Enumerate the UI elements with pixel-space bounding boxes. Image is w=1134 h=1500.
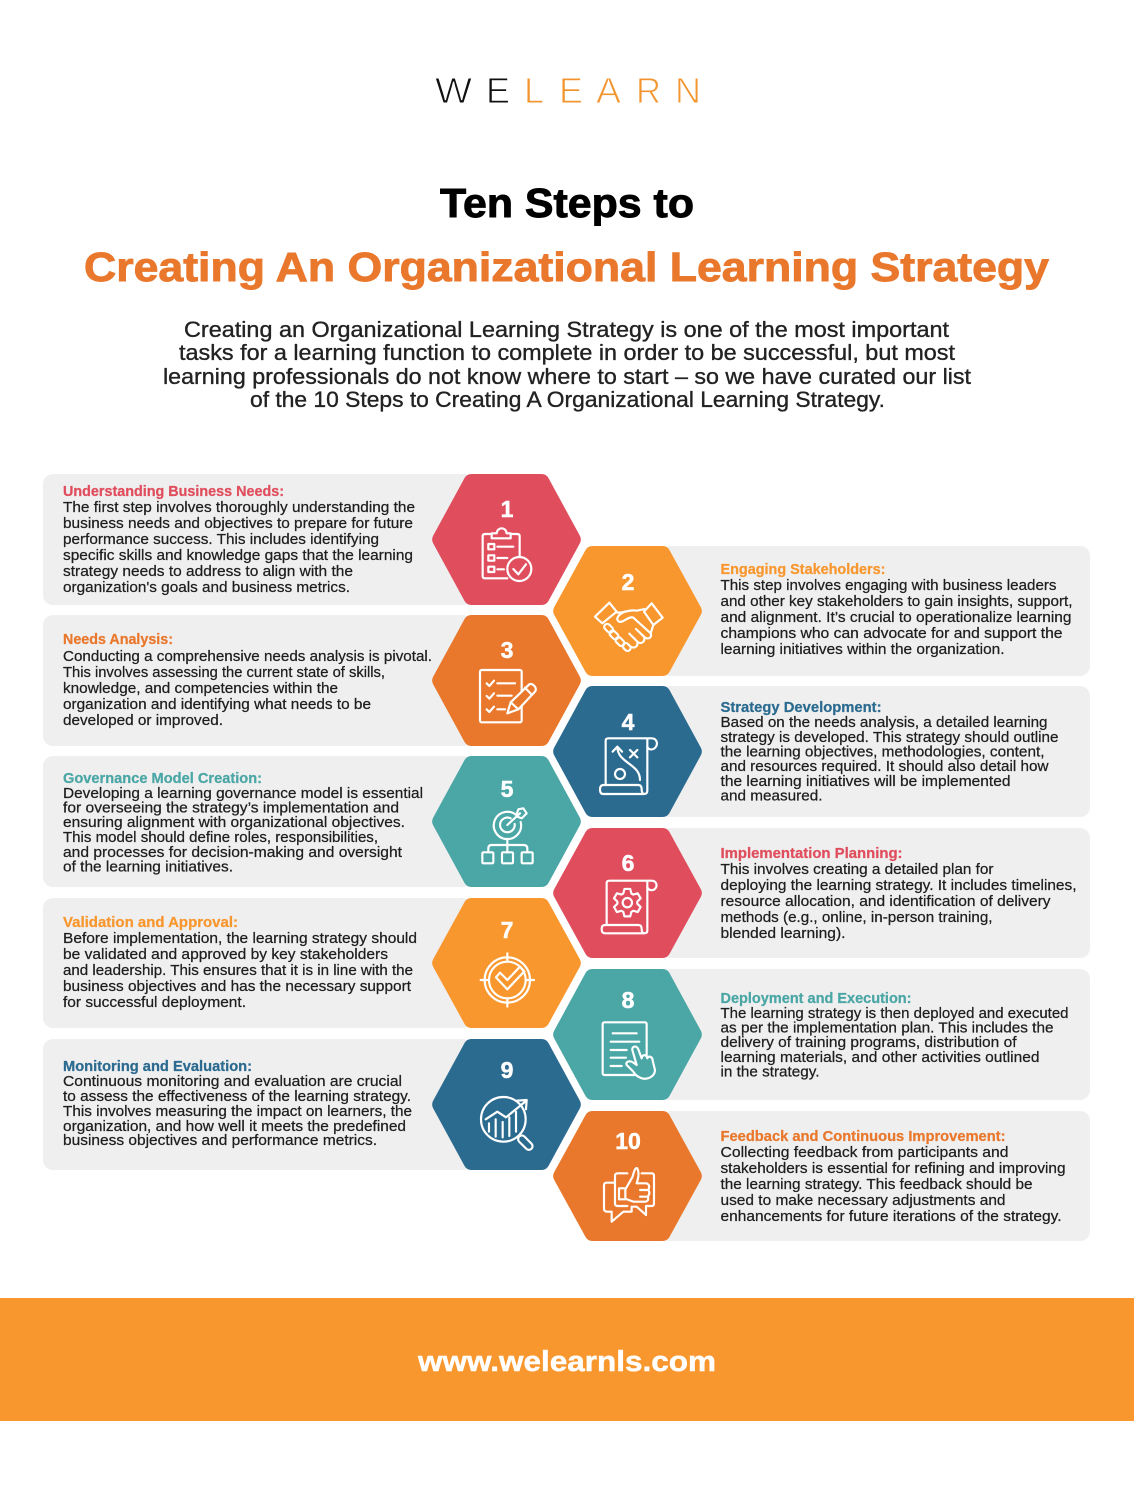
title: Creating An Organizational Learning Strategy: [84, 244, 1049, 290]
intro text: [163, 317, 971, 412]
body: step 4: the learning initiatives will be implemented: [720, 773, 1010, 790]
body: step 1: organization's goals and business metrics.: [63, 579, 350, 596]
intro text: of the 10 Steps to Creating A Organizational Learning Strategy.: [250, 387, 885, 412]
heading: step 8: Deployment and Execution:: [720, 991, 912, 1007]
body: step 9: organization, and how well it meets the predefined: [63, 1118, 406, 1135]
hexagon: step 10: [561, 1119, 694, 1233]
heading: step 9: Monitoring and Evaluation:: [63, 1059, 252, 1075]
body: step 1: strategy needs to address to align with the: [63, 563, 353, 580]
body: step 3: developed or improved.: [63, 712, 223, 729]
panel: step 9: [43, 1039, 473, 1170]
icon: thumbs up with speech bubbles: [604, 1168, 654, 1222]
heading: step 4: Strategy Development:: [720, 700, 882, 716]
body: step 1: performance success. This includes identifying: [63, 531, 379, 548]
body: step 10: enhancements for future iterations of the strategy.: [720, 1208, 1062, 1225]
logo: WELEARN: A: [596, 70, 621, 111]
body: step 6: blended learning).: [720, 925, 846, 942]
number 5: 5: [501, 776, 514, 802]
panel: step 7: [43, 898, 473, 1028]
panel: step 3: [43, 615, 473, 746]
number 4: 4: [622, 709, 635, 735]
body: step 10: [720, 1144, 1066, 1225]
icon: gear scroll: [602, 881, 657, 933]
body: step 3: This involves assessing the current state of skills,: [63, 664, 385, 681]
icon: clipboard with check: [483, 528, 531, 581]
body: step 7: and leadership. This ensures that it is in line with the: [63, 962, 413, 979]
body: step 4: and measured.: [720, 788, 822, 804]
body: step 6: methods (e.g., online, in-person training,: [720, 909, 992, 926]
body: step 10: stakeholders is essential for refining and improving: [720, 1160, 1066, 1177]
icon: strategy scroll: [600, 738, 657, 794]
body: step 4: strategy is developed. This strategy should outline: [720, 729, 1058, 746]
body: step 5: of the learning initiatives.: [63, 858, 233, 876]
body: step 5: and processes for decision-making and oversight: [63, 844, 403, 861]
heading: step 6: Implementation Planning:: [720, 846, 902, 862]
hexagon: step 5: [440, 764, 573, 879]
hexagon: step 7: [440, 906, 573, 1020]
body: step 4: the learning objectives, methodologies, content,: [720, 744, 1044, 760]
icon: checklist and pencil: [480, 670, 536, 722]
intro text: tasks for a learning function to complete in order to be successful, but most: [179, 340, 955, 365]
hexagon: step 4: [561, 694, 694, 809]
logo: WELEARN: E: [559, 70, 583, 111]
icon: target and org chart: [482, 808, 533, 863]
hexagon: step 1: [440, 482, 573, 597]
icon: handshake: [595, 603, 663, 652]
number 9: 9: [501, 1057, 513, 1083]
logo: WELEARN: W: [435, 70, 472, 111]
body: step 9: to assess the effectiveness of the learning strategy.: [63, 1088, 411, 1105]
body: step 9: business objectives and performance metrics.: [63, 1132, 377, 1149]
logo: WELEARN: N: [675, 70, 701, 111]
number 2: 2: [622, 569, 634, 595]
logo: WELEARN: R: [636, 70, 661, 111]
body: step 1: [63, 499, 415, 596]
hexagon: step 8: [561, 977, 694, 1092]
body: step 9: This involves measuring the impact on learners, the: [63, 1103, 412, 1120]
body: step 8: as per the implementation plan. This includes the: [720, 1020, 1054, 1036]
title: [84, 180, 1049, 290]
body: step 3: organization and identifying what needs to be: [63, 696, 371, 713]
number 8: 8: [622, 987, 635, 1013]
panel: step 1: [43, 474, 473, 605]
body: step 5: ensuring alignment with organizational objectives.: [63, 814, 405, 831]
body: step 8: in the strategy.: [720, 1064, 820, 1080]
body: step 5: Developing a learning governance model is essential: [63, 785, 423, 802]
icon: document with hand: [603, 1022, 655, 1079]
body: step 5: [63, 785, 423, 876]
body: step 5: for overseeing the strategy’s implementation and: [63, 800, 399, 816]
body: step 8: delivery of training programs, distribution of: [720, 1034, 1017, 1051]
body: step 7: Before implementation, the learning strategy should: [63, 930, 417, 947]
hexagon: step 9: [440, 1047, 573, 1162]
number 1: 1: [501, 496, 514, 522]
body: step 6: deploying the learning strategy. It includes timelines,: [720, 877, 1076, 894]
body: step 8: [720, 1005, 1068, 1080]
heading: step 5: Governance Model Creation:: [63, 771, 262, 787]
body: step 6: This involves creating a detailed plan for: [720, 861, 994, 878]
body: step 1: The first step involves thoroughly understanding the: [63, 499, 415, 516]
footer band: [0, 1298, 1134, 1421]
number 6: 6: [622, 850, 634, 876]
hexagon: step 6: [561, 836, 694, 950]
body: step 1: specific skills and knowledge gaps that the learning: [63, 547, 413, 564]
hexagon: step 2: [561, 554, 694, 668]
panel: step 2: [660, 546, 1090, 676]
footer url: www.welearnls.com: [417, 1346, 716, 1378]
body: step 3: Conducting a comprehensive needs analysis is pivotal.: [63, 648, 432, 665]
body: step 2: This step involves engaging with business leaders: [720, 577, 1056, 594]
body: step 2: [720, 577, 1072, 658]
logo: WELEARN: [435, 70, 701, 111]
body: step 10: used to make necessary adjustments and: [720, 1192, 1006, 1209]
body: step 4: Based on the needs analysis, a detailed learning: [720, 714, 1048, 731]
body: step 7: be validated and approved by key stakeholders: [63, 946, 388, 963]
logo: WELEARN: L: [524, 70, 544, 111]
heading: step 3: Needs Analysis:: [63, 632, 173, 648]
body: step 6: [720, 861, 1076, 942]
body: step 2: and alignment. It’s crucial to operationalize learning: [720, 609, 1072, 626]
body: step 10: Collecting feedback from participants and: [720, 1144, 1008, 1161]
body: step 8: learning materials, and other activities outlined: [720, 1049, 1040, 1066]
logo: WELEARN: E: [486, 70, 510, 111]
body: step 10: the learning strategy. This feedback should be: [720, 1176, 1032, 1193]
heading: step 2: Engaging Stakeholders:: [720, 562, 886, 578]
body: step 1: business needs and objectives to prepare for future: [63, 515, 413, 532]
body: step 7: business objectives and has the necessary support: [63, 978, 412, 995]
panel: step 5: [43, 756, 473, 887]
heading: step 1: Understanding Business Needs:: [63, 484, 284, 500]
body: step 5: This model should define roles, responsibilities,: [63, 829, 378, 846]
body: step 7: for successful deployment.: [63, 994, 246, 1011]
panel: step 4: [660, 686, 1090, 817]
hexagon: step 3: [440, 623, 573, 738]
number 10: 10: [615, 1128, 641, 1154]
body: step 4: and resources required. It should also detail how: [720, 758, 1049, 775]
intro text: Creating an Organizational Learning Strategy is one of the most important: [184, 317, 949, 342]
panel: step 10: [660, 1111, 1090, 1241]
body: step 3: [63, 648, 432, 729]
title: Ten Steps to: [440, 180, 694, 226]
icon: target check: [481, 953, 534, 1007]
body: step 2: champions who can advocate for and support the: [720, 625, 1062, 642]
intro text: learning professionals do not know where to start – so we have curated our list: [163, 364, 971, 389]
body: step 3: knowledge, and competencies within the: [63, 680, 338, 697]
body: step 6: resource allocation, and identification of delivery: [720, 893, 1051, 910]
body: step 7: [63, 930, 417, 1011]
body: step 9: [63, 1073, 412, 1149]
number 7: 7: [501, 917, 513, 943]
body: step 2: and other key stakeholders to gain insights, support,: [720, 593, 1072, 610]
body: step 8: The learning strategy is then deployed and executed: [720, 1005, 1068, 1022]
number 3: 3: [501, 637, 513, 663]
heading: step 10: Feedback and Continuous Improvement:: [720, 1129, 1006, 1145]
panel: step 8: [660, 969, 1090, 1100]
heading: step 7: Validation and Approval:: [63, 915, 238, 931]
body: step 9: Continuous monitoring and evaluation are crucial: [63, 1073, 402, 1090]
panel: step 6: [660, 828, 1090, 958]
body: step 4: [720, 714, 1058, 804]
icon: magnifier with growth chart: [481, 1097, 534, 1151]
body: step 2: learning initiatives within the organization.: [720, 641, 1004, 658]
